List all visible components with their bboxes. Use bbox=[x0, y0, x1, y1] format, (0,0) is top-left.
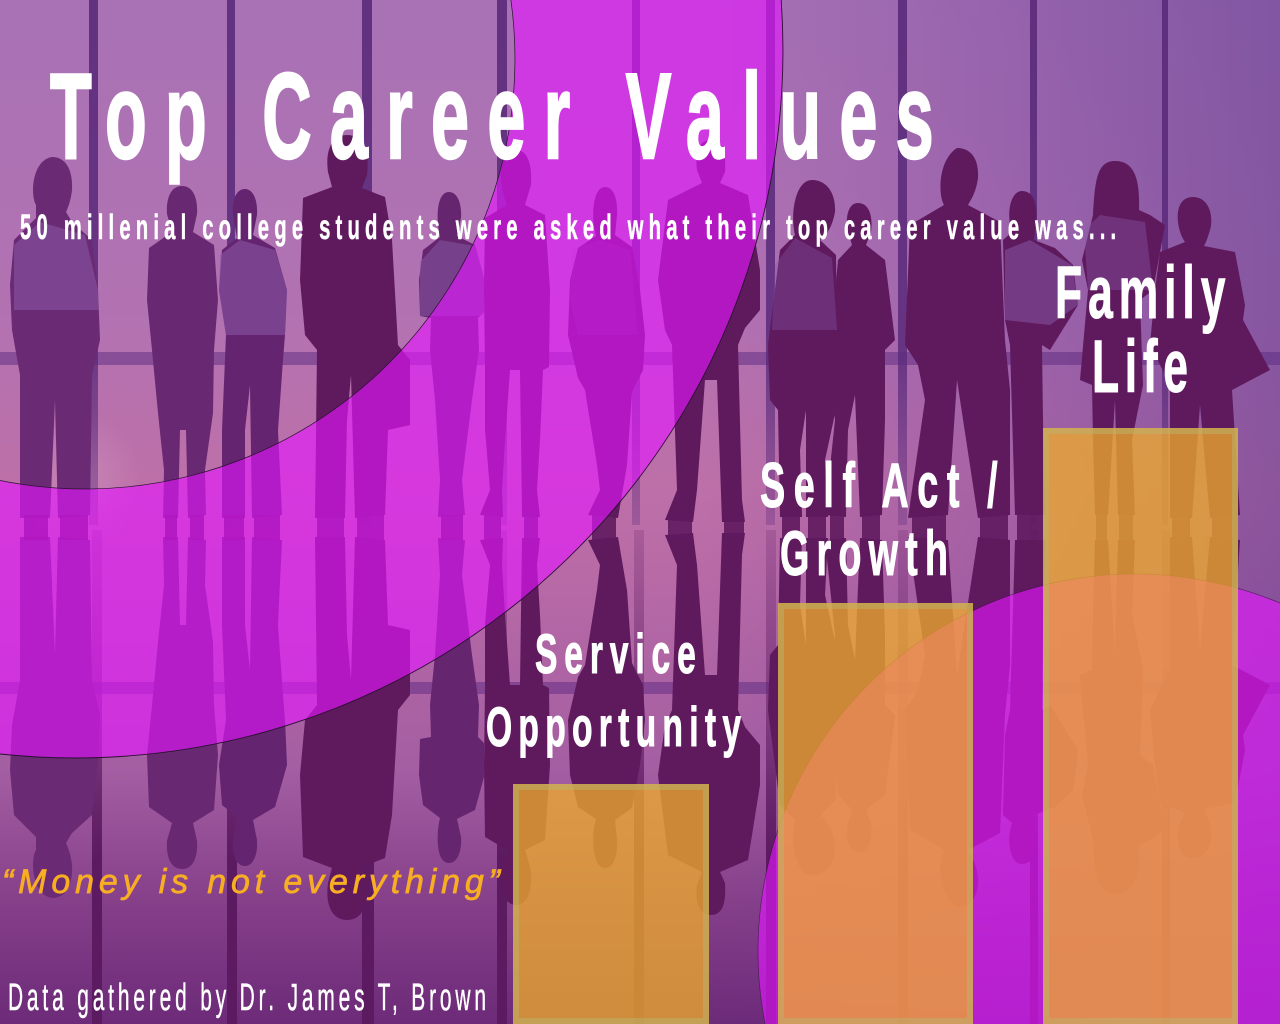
bar chart bbox=[516, 431, 1235, 1021]
label: Service Opportunity: Opportunity bbox=[486, 695, 741, 758]
bar: Family Life bbox=[1046, 431, 1235, 1021]
magenta circle bottom-right bbox=[758, 574, 1280, 1024]
quote: “Money is not everything” bbox=[2, 863, 502, 901]
bar: Self Act / Growth bbox=[781, 606, 970, 1021]
feet contact ripple on the floor bbox=[24, 515, 1238, 540]
lighter shirts bbox=[14, 215, 1153, 335]
title: Top Career Values bbox=[50, 47, 934, 184]
label: Self Act / Growth: Growth bbox=[780, 519, 948, 590]
label: Family Life: Family bbox=[1055, 251, 1225, 334]
label: Self Act / Growth bbox=[760, 451, 998, 590]
magenta ring bbox=[0, 0, 783, 758]
label: Family Life bbox=[1055, 251, 1225, 408]
reflection of people on the floor bbox=[10, 533, 1270, 920]
subtitle: 50 millenial college students were asked what their top career value was... bbox=[20, 208, 1116, 248]
label: Family Life: Life bbox=[1092, 325, 1188, 408]
label: Self Act / Growth: Self Act / bbox=[760, 451, 998, 522]
bar: Service Opportunity bbox=[516, 787, 706, 1021]
credit: Data gathered by Dr. James T, Brown bbox=[8, 977, 486, 1019]
label: Service Opportunity bbox=[486, 622, 741, 758]
silhouettes of standing people bbox=[10, 135, 1270, 522]
label: Service Opportunity: Service bbox=[535, 622, 696, 685]
